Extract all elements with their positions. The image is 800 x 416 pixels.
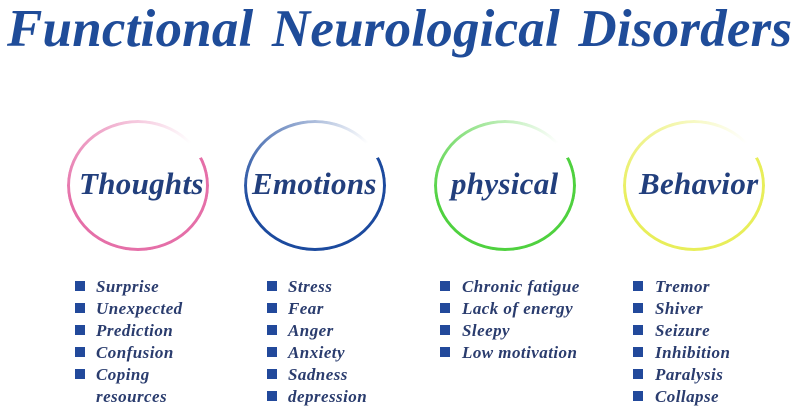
list: emotions	[267, 277, 367, 406]
item	[440, 321, 510, 340]
item	[633, 277, 710, 296]
item	[267, 321, 334, 340]
list: physical: Chronic fatigue	[462, 277, 580, 296]
list: behavior	[633, 277, 730, 406]
item	[267, 299, 324, 318]
circle: thoughts	[67, 120, 209, 251]
title: Functional Neurological Disorders	[7, 0, 792, 58]
list: physical: Sleepy	[462, 321, 510, 340]
list: emotions: Anxiety	[288, 343, 345, 362]
list: physical	[440, 277, 580, 362]
heading: physical: physical	[451, 166, 558, 201]
circle: behavior	[623, 120, 765, 251]
list: behavior: Collapse	[655, 387, 719, 406]
list: physical: Low motivation	[462, 343, 577, 362]
item	[75, 343, 174, 362]
item	[633, 365, 723, 384]
item	[440, 277, 580, 296]
heading: thoughts: Thoughts	[79, 166, 204, 201]
item	[267, 277, 332, 296]
item	[633, 387, 719, 406]
panel: thoughts	[67, 120, 209, 406]
item	[633, 343, 730, 362]
list: behavior: Seizure	[655, 321, 710, 340]
panel: emotions	[244, 120, 386, 406]
list: thoughts: Coping	[96, 365, 150, 384]
list: thoughts	[75, 277, 183, 406]
item	[633, 321, 710, 340]
item	[633, 299, 703, 318]
list: emotions: Sadness	[288, 365, 348, 384]
panel: physical	[434, 120, 580, 362]
list: thoughts: Surprise	[96, 277, 159, 296]
item	[267, 387, 367, 406]
item	[440, 343, 577, 362]
item	[75, 365, 150, 384]
circle: emotions	[244, 120, 386, 251]
list: emotions: Anger	[288, 321, 334, 340]
list: thoughts: Unexpected	[96, 299, 183, 318]
list: thoughts: Prediction	[96, 321, 173, 340]
list: emotions: Fear	[288, 299, 324, 318]
list: behavior: Tremor	[655, 277, 710, 296]
item	[267, 365, 348, 384]
item	[75, 277, 159, 296]
heading: behavior: Behavior	[639, 166, 759, 201]
panel: behavior	[623, 120, 765, 406]
list: behavior: Paralysis	[655, 365, 723, 384]
heading: emotions: Emotions	[252, 166, 377, 201]
list: behavior: Inhibition	[655, 343, 730, 362]
list: physical: Lack of energy	[462, 299, 573, 318]
item	[440, 299, 573, 318]
list: thoughts: Confusion	[96, 343, 174, 362]
circle: physical	[434, 120, 576, 251]
item	[267, 343, 345, 362]
item	[75, 321, 173, 340]
item	[75, 299, 183, 318]
item continuation: resources	[96, 387, 167, 406]
list: emotions: Stress	[288, 277, 332, 296]
list: behavior: Shiver	[655, 299, 703, 318]
list: emotions: depression	[288, 387, 367, 406]
